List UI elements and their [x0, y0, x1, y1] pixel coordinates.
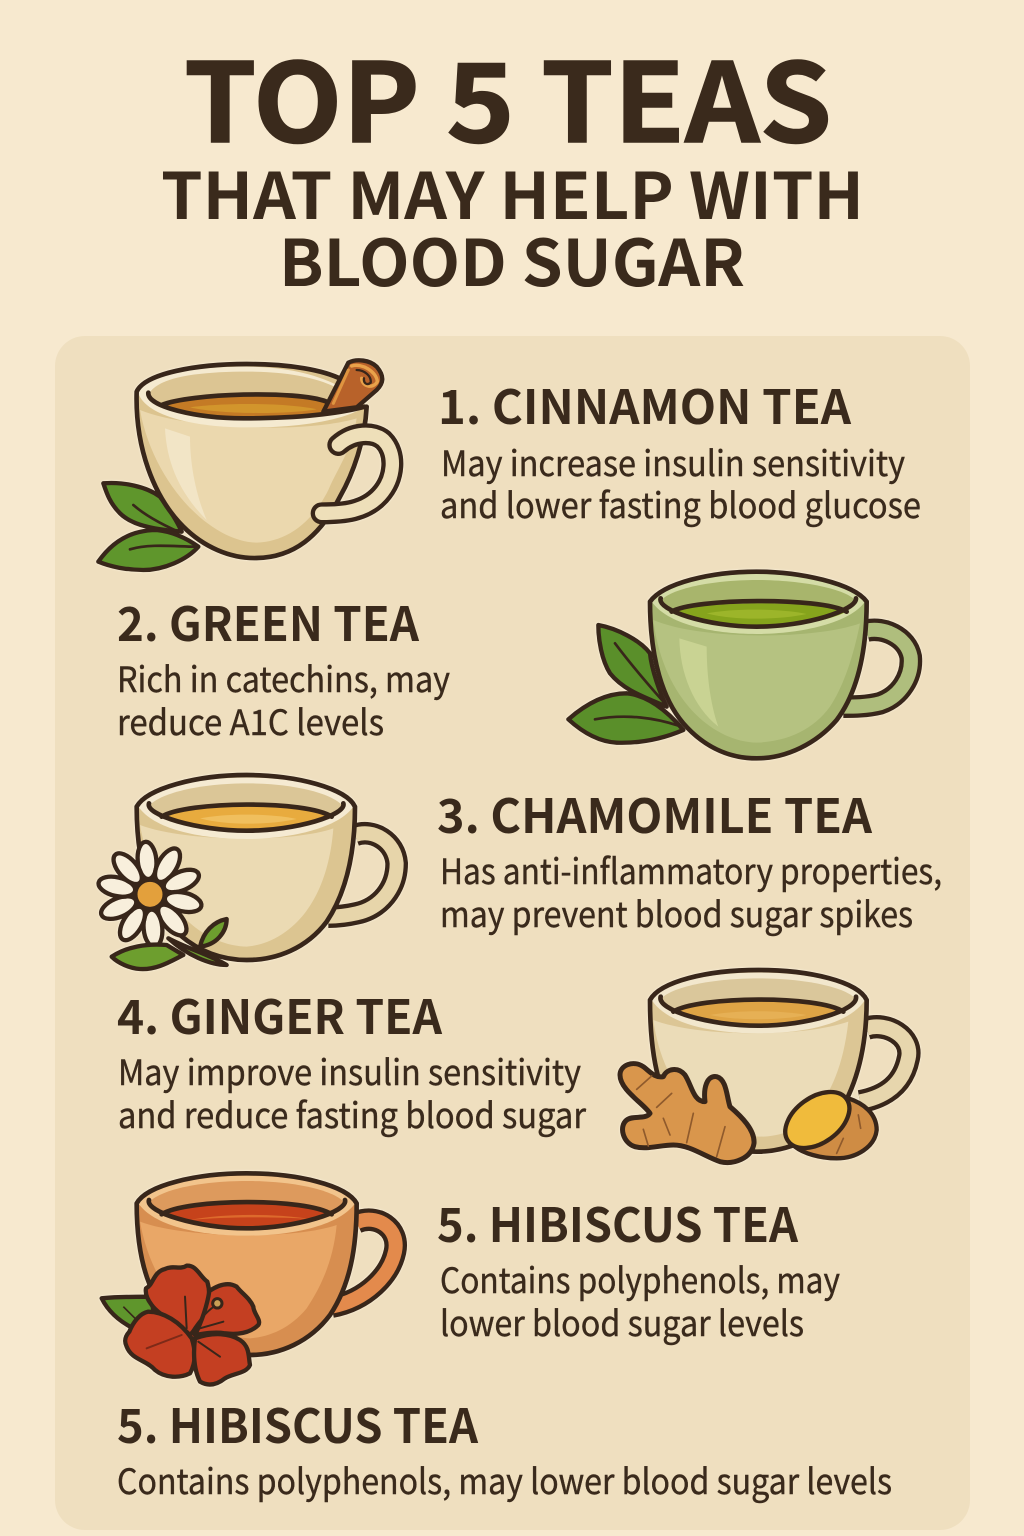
text: green tea: Rich in catechins, may: [117, 652, 450, 703]
text: ginger tea: [117, 979, 586, 1139]
text: chamomile tea: may prevent blood sugar spikes: [440, 887, 913, 938]
text: ginger tea: and reduce fasting blood sugar: [118, 1088, 586, 1139]
text: green tea: [117, 586, 450, 746]
title: THAT MAY HELP WITH: [161, 146, 864, 238]
title: [161, 17, 864, 305]
text: cinnamon tea: May increase insulin sensitivity: [441, 436, 905, 487]
icon: hibiscus tea cup: [102, 1173, 396, 1385]
text: cinnamon tea: and lower fasting blood glucose: [440, 478, 921, 529]
text: chamomile tea: 3. CHAMOMILE TEA: [437, 778, 873, 847]
text: hibiscus tea: Contains polyphenols, may: [440, 1253, 840, 1304]
icon: chamomile tea cup: [97, 775, 397, 969]
title: BLOOD SUGAR: [279, 213, 745, 305]
text: cinnamon tea: 1. CINNAMON TEA: [438, 369, 852, 438]
text: hibiscus tea repeat: [117, 1388, 892, 1505]
text: cinnamon tea: [438, 369, 921, 529]
text: hibiscus tea: 5. HIBISCUS TEA: [437, 1187, 799, 1256]
text: hibiscus tea: lower blood sugar levels: [440, 1296, 804, 1347]
text: hibiscus tea: [437, 1187, 840, 1347]
text: green tea: reduce A1C levels: [117, 695, 384, 746]
text: green tea: 2. GREEN TEA: [117, 586, 420, 655]
text: chamomile tea: Has anti-inflammatory properties,: [440, 844, 942, 895]
text: ginger tea: May improve insulin sensitivity: [118, 1045, 581, 1096]
text: hibiscus tea repeat: 5. HIBISCUS TEA: [117, 1388, 479, 1457]
text: chamomile tea: [437, 778, 942, 938]
icon: green tea cup: [568, 572, 911, 758]
text: hibiscus tea repeat: Contains polyphenols, may lower blood sugar levels: [117, 1454, 892, 1505]
icon: ginger tea cup: [620, 970, 909, 1163]
panel: tea list background: [55, 336, 970, 1530]
icon: cinnamon tea cup: [98, 360, 392, 570]
text: ginger tea: 4. GINGER TEA: [117, 979, 443, 1048]
title: TOP 5 TEAS: [184, 17, 832, 174]
